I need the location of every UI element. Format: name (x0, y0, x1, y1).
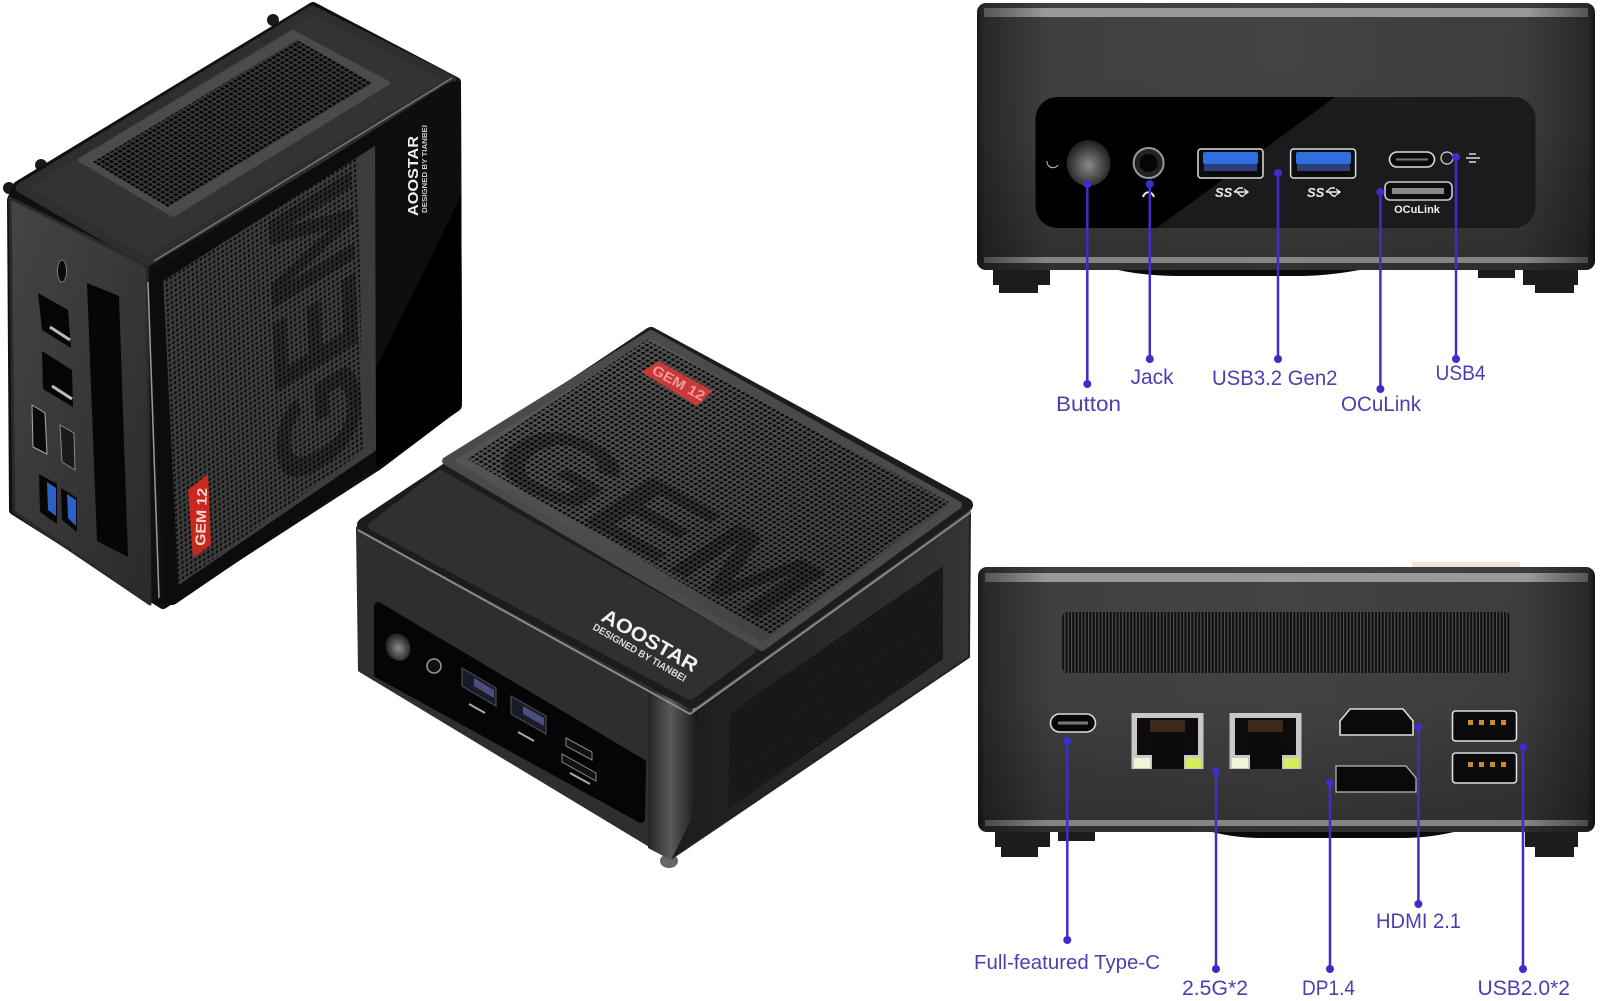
right device logo: AOOSTAR (598, 605, 702, 677)
callout: HDMI 2.1 (1376, 723, 1461, 933)
HDMI port (1340, 709, 1413, 735)
OCuLink port (1385, 182, 1452, 200)
USB4 mark (1441, 152, 1480, 164)
USB-A port 1 (1198, 149, 1263, 178)
OCuLink mark: OCuLink (1394, 204, 1441, 216)
front glass panel (1036, 97, 1540, 230)
rear callouts (974, 723, 1570, 1000)
front body (977, 3, 1595, 270)
callout: DP1.4: DP1.4 (1302, 977, 1355, 1000)
callout: Full-featured Type-C (974, 737, 1160, 974)
left device tagline: DESIGNED BY TIANBEI (420, 125, 429, 213)
callout: USB2.0*2 (1478, 743, 1570, 1000)
DP port (1336, 766, 1416, 792)
right device foot (660, 854, 678, 868)
right device right side (672, 512, 970, 858)
left device: vertical view (3, 7, 462, 604)
callout: 2.5G*2 (1182, 767, 1248, 1000)
power mark (1047, 161, 1058, 168)
USB 2.0 port 2 (1452, 753, 1516, 783)
USB mark 1: SS (1215, 185, 1233, 200)
right device front panel (378, 606, 642, 819)
right device grille plate: GEM (457, 403, 856, 637)
right device power button (381, 629, 415, 665)
USB mark 2: SS (1307, 185, 1325, 200)
callout: 2.5G*2: 2.5G*2 (1182, 977, 1248, 1000)
right device grille plate (446, 334, 958, 647)
callout: HDMI 2.1: HDMI 2.1 (1376, 910, 1461, 933)
rear vent (1062, 612, 1511, 673)
tan scrap (1412, 562, 1520, 568)
rear Type-C port (1050, 714, 1096, 732)
right device: angled view (358, 334, 971, 868)
RJ45 port 1 (1132, 713, 1204, 769)
front view device (977, 3, 1595, 293)
USB4 port (1390, 152, 1434, 167)
callout: Full-featured Type-C: Full-featured Type-C (974, 952, 1160, 974)
callout: USB3.2 Gen2 (1212, 169, 1338, 390)
left device feet (3, 14, 279, 508)
callout: Button: Button (1056, 393, 1121, 416)
right device glass strip (372, 474, 752, 696)
RJ45 port 2 (1230, 713, 1302, 769)
callout: USB4: USB4 (1436, 362, 1486, 385)
left device logo: AOOSTAR (405, 136, 422, 216)
callout: USB3.2 Gen2: USB3.2 Gen2 (1212, 367, 1338, 390)
callout: Button (1056, 180, 1121, 416)
callout: DP1.4 (1302, 779, 1355, 1000)
USB mark 1 (1215, 185, 1248, 200)
left device upper vent (80, 32, 388, 215)
left device GEM 12 badge (188, 474, 211, 558)
audio jack (1134, 148, 1164, 197)
front callouts (1056, 153, 1486, 416)
rear view device (978, 562, 1595, 857)
callout: OCuLink: OCuLink (1341, 393, 1421, 416)
USB 2.0 port 1 (1452, 711, 1516, 741)
right device left side (358, 528, 692, 856)
rear body (978, 567, 1595, 832)
callout: Jack: Jack (1131, 366, 1174, 389)
right device front ports (462, 668, 596, 784)
rear feet (995, 830, 1578, 857)
left device port face (10, 198, 150, 604)
callout: USB4 (1436, 153, 1486, 385)
left device main face (156, 90, 455, 598)
left device dotted grille (163, 158, 363, 584)
left device silhouette (12, 7, 457, 604)
callout: USB2.0*2: USB2.0*2 (1478, 977, 1570, 1000)
callout: Jack (1131, 180, 1174, 389)
left device dotted grille: GEM (242, 147, 388, 514)
front feet (993, 268, 1578, 293)
power button (1067, 140, 1111, 186)
left device lock slot (58, 260, 66, 282)
right device corner (648, 688, 698, 860)
left device long slot (87, 283, 128, 557)
callout: OCuLink (1341, 188, 1421, 416)
right device tagline: DESIGNED BY TIANBEI (590, 622, 688, 685)
left device upper face (20, 10, 452, 262)
right device top outer (364, 334, 966, 702)
left device glass panel (375, 82, 462, 470)
right device jack (427, 659, 441, 673)
right device side vent (728, 566, 943, 809)
right device GEM 12 badge: GEM 12 (650, 362, 708, 404)
left device GEM 12 badge: GEM 12 (192, 487, 210, 546)
right device GEM 12 badge (641, 361, 713, 406)
USB-A port 2 (1291, 149, 1356, 178)
left device ports (32, 293, 77, 532)
USB mark 2 (1307, 185, 1340, 200)
